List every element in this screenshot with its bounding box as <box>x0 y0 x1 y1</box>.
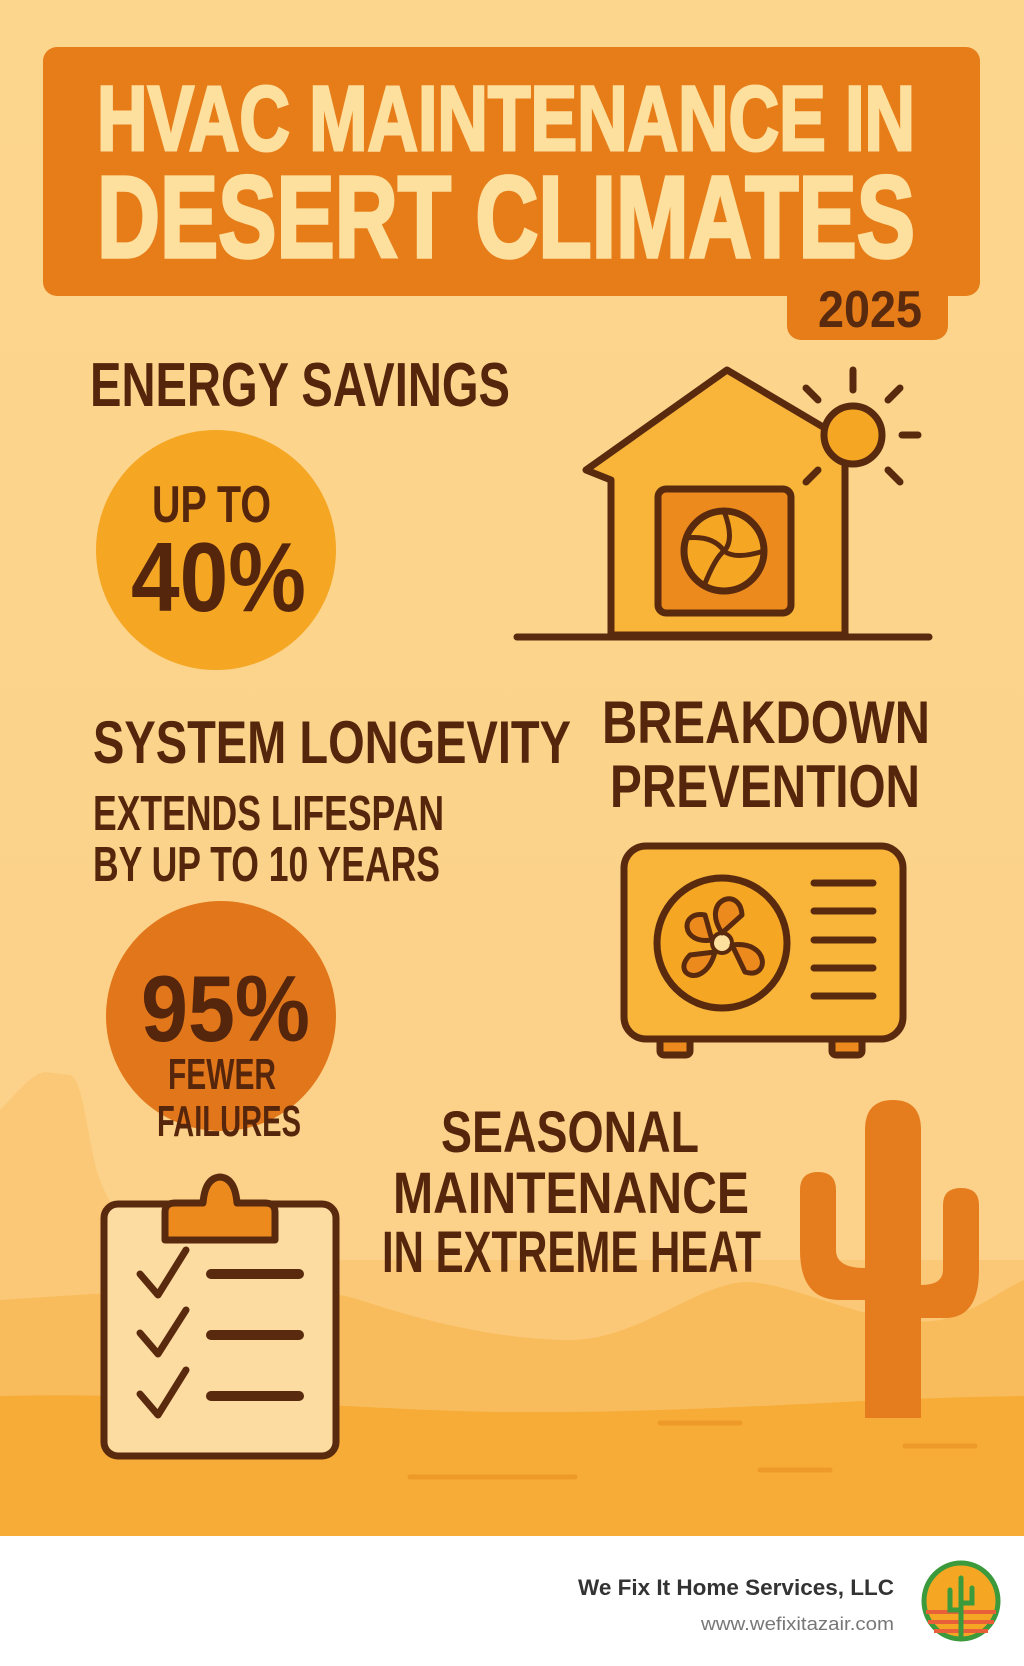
stat circle: up to 40%: UP TO <box>152 476 271 534</box>
footer url: www.wefixitazair.com <box>700 1614 894 1634</box>
footer company name: We Fix It Home Services, LLC <box>578 1575 894 1600</box>
longevity description: BY UP TO 10 YEARS <box>93 838 440 892</box>
icon: AC unit <box>624 846 903 1055</box>
icon: company logo <box>924 1563 998 1639</box>
stat circle: 95% fewer failures: FEWER <box>168 1050 276 1099</box>
heading: system longevity <box>93 709 571 892</box>
title banner <box>43 47 980 340</box>
heading: breakdown prevention: PREVENTION <box>610 753 920 820</box>
heading: seasonal maintenance: MAINTENANCE <box>393 1161 749 1226</box>
heading: seasonal maintenance: IN EXTREME HEAT <box>382 1220 761 1285</box>
stat circle: 95% fewer failures: FAILURES <box>157 1097 301 1146</box>
stat circle: up to 40%: 40% <box>131 522 306 632</box>
stat circle: 95% fewer failures: 95% <box>141 956 310 1061</box>
icon: house with sun <box>517 370 929 637</box>
icon: clipboard checklist <box>104 1177 336 1456</box>
longevity description: EXTENDS LIFESPAN <box>93 787 444 841</box>
heading: energy savings: ENERGY SAVINGS <box>90 351 510 420</box>
heading: breakdown prevention <box>602 689 930 820</box>
desert landscape background <box>0 1072 1024 1536</box>
icon: cactus <box>800 1100 979 1418</box>
stat circle: 95% fewer failures <box>106 901 336 1146</box>
heading: system longevity: SYSTEM LONGEVITY <box>93 709 571 776</box>
heading: breakdown prevention: BREAKDOWN <box>602 689 930 756</box>
heading: seasonal maintenance <box>382 1100 761 1285</box>
year tab: 2025 <box>818 281 922 339</box>
stat circle: up to 40% <box>96 430 336 670</box>
longevity description <box>93 787 444 892</box>
heading: seasonal maintenance: SEASONAL <box>441 1100 699 1165</box>
